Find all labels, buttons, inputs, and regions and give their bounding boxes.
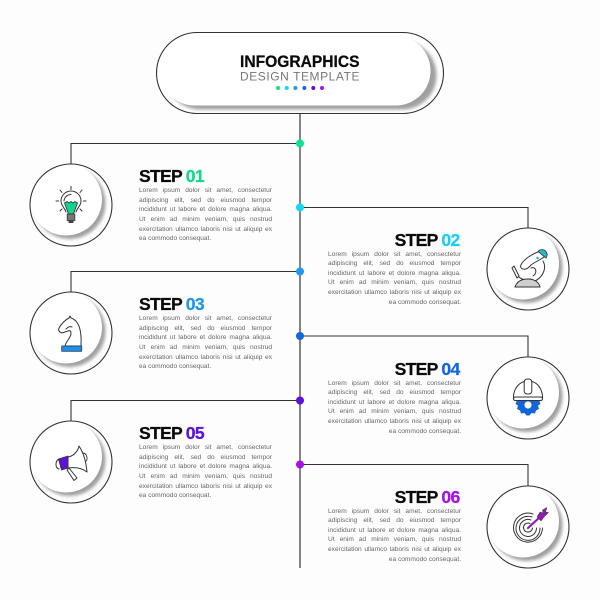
text block: step 05: ea commodo consequat. bbox=[139, 492, 211, 499]
text block: step 03: incididunt ut labore et dolore magna aliqua. bbox=[139, 334, 272, 341]
title panel: DESIGN TEMPLATE bbox=[240, 70, 360, 84]
text block: step 06: adipiscing elit, sed do eiusmod tempor bbox=[328, 517, 461, 524]
text block: step 06: Lorem ipsum dolor sit amet, consectetur bbox=[328, 508, 461, 514]
icon: microscope bbox=[512, 250, 547, 287]
text block: step 06: exercitation ullamco laboris nisi ut aliquip ex bbox=[328, 546, 461, 553]
text block: step 04: exercitation ullamco laboris nisi ut aliquip ex bbox=[328, 418, 461, 425]
text block: step 02: Lorem ipsum dolor sit amet, consectetur bbox=[328, 250, 461, 258]
text block: step 04: ea commodo consequat. bbox=[389, 428, 461, 435]
text block: step 06 bbox=[328, 508, 461, 563]
text block: step 04: adipiscing elit, sed do eiusmod tempor bbox=[328, 389, 461, 396]
heading: step 01: STEP 01 bbox=[139, 166, 204, 186]
text block: step 01: adipiscing elit, sed do eiusmod tempor bbox=[139, 197, 272, 204]
text block: step 01: ea commodo consequat. bbox=[139, 235, 211, 242]
text block: step 04: Lorem ipsum dolor sit amet, consectetur bbox=[328, 380, 461, 386]
text block: step 01: incididunt ut labore et dolore magna aliqua. bbox=[139, 206, 272, 213]
text block: step 03: adipiscing elit, sed do eiusmod tempor bbox=[139, 325, 272, 332]
text block: step 01: exercitation ullamco laboris nisi ut aliquip ex bbox=[139, 226, 272, 232]
title panel: INFOGRAPHICS bbox=[240, 53, 360, 71]
icon: light bulb bbox=[56, 186, 86, 223]
title panel bbox=[156, 32, 444, 114]
text block: step 04: Ut enim ad minim veniam, quis nostrud bbox=[328, 408, 461, 415]
text block: step 02: exercitation ullamco laboris nisi ut aliquip ex bbox=[328, 289, 461, 296]
text block: step 05: incididunt ut labore et dolore magna aliqua. bbox=[139, 463, 272, 470]
text block: step 02: ea commodo consequat. bbox=[389, 299, 461, 306]
text block: step 05: Lorem ipsum dolor sit amet, consectetur bbox=[139, 444, 272, 451]
panel: step 01 bbox=[29, 164, 272, 246]
text block: step 04 bbox=[328, 380, 461, 435]
icon: megaphone bbox=[56, 446, 87, 480]
panel: step 04 bbox=[328, 356, 570, 440]
text block: step 01: Ut enim ad minim veniam, quis nostrud bbox=[139, 216, 272, 223]
text block: step 02: Ut enim ad minim veniam, quis nostrud bbox=[328, 279, 461, 286]
heading: step 03: STEP 03 bbox=[139, 294, 204, 314]
text block: step 02 bbox=[328, 250, 461, 306]
heading: step 04: STEP 04 bbox=[395, 359, 460, 379]
text block: step 01: Lorem ipsum dolor sit amet, consectetur bbox=[139, 187, 272, 194]
text block: step 03: Lorem ipsum dolor sit amet, consectetur bbox=[139, 315, 272, 322]
text block: step 03: Ut enim ad minim veniam, quis nostrud bbox=[139, 344, 272, 351]
heading: step 05: STEP 05 bbox=[139, 423, 204, 443]
panel: step 05 bbox=[29, 420, 272, 504]
text block: step 05: Ut enim ad minim veniam, quis nostrud bbox=[139, 473, 272, 480]
text block: step 03 bbox=[139, 315, 272, 370]
panel: step 03 bbox=[29, 292, 272, 374]
text block: step 05: adipiscing elit, sed do eiusmod tempor bbox=[139, 454, 272, 461]
text block: step 06: incididunt ut labore et dolore magna aliqua. bbox=[328, 527, 461, 534]
text block: step 02: incididunt ut labore et dolore magna aliqua. bbox=[328, 270, 461, 277]
heading: step 06: STEP 06 bbox=[395, 487, 460, 507]
icon: target with arrow bbox=[514, 508, 548, 542]
text block: step 03: ea commodo consequat. bbox=[139, 363, 211, 370]
text block: step 06: Ut enim ad minim veniam, quis nostrud bbox=[328, 536, 461, 543]
text block: step 05: exercitation ullamco laboris nisi ut aliquip ex bbox=[139, 482, 272, 490]
text block: step 05 bbox=[139, 444, 272, 499]
text block: step 04: incididunt ut labore et dolore magna aliqua. bbox=[328, 399, 461, 406]
icon: chess knight bbox=[59, 316, 82, 351]
heading: step 02: STEP 02 bbox=[395, 230, 460, 250]
text block: step 03: exercitation ullamco laboris nisi ut aliquip ex bbox=[139, 354, 272, 360]
panel: step 06 bbox=[328, 486, 570, 568]
icon: helmet and gear bbox=[513, 379, 543, 416]
text block: step 06: ea commodo consequat. bbox=[389, 556, 461, 563]
panel: step 02 bbox=[328, 228, 570, 310]
text block: step 02: adipiscing elit, sed do eiusmod tempor bbox=[328, 260, 461, 267]
text block: step 01 bbox=[139, 187, 272, 242]
